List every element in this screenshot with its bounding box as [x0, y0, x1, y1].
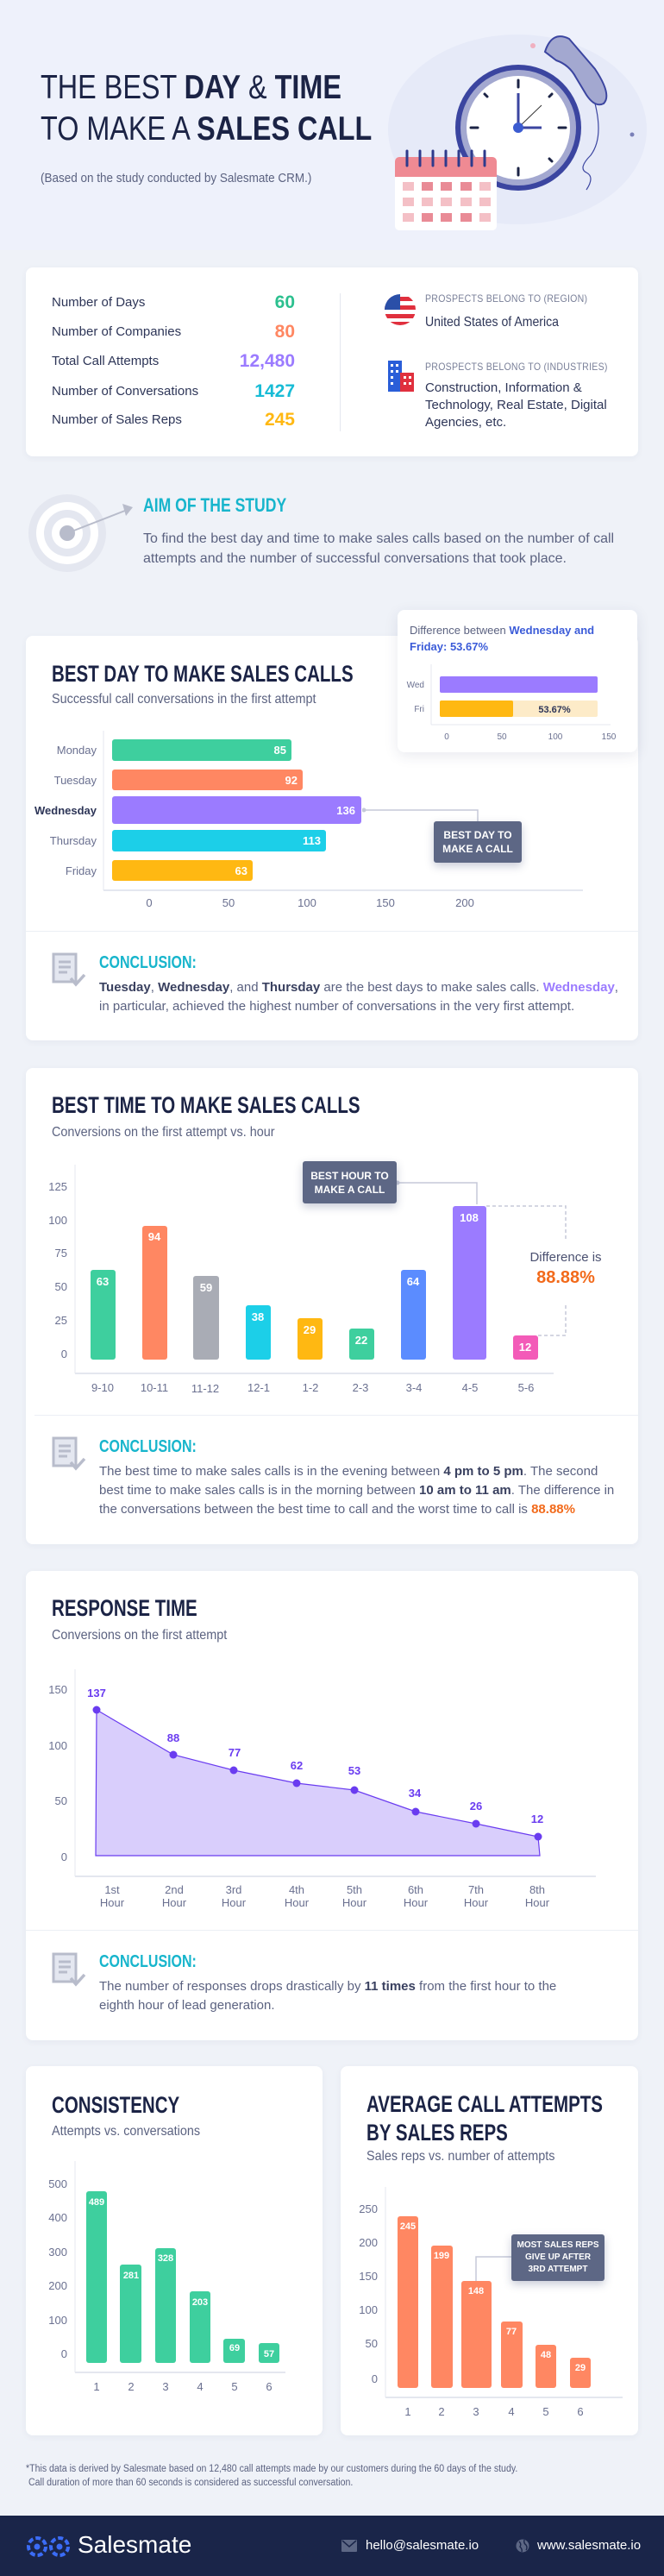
inset chart: 50 — [497, 732, 507, 742]
heading: best day: BEST DAY TO MAKE SALES CALLS — [52, 661, 354, 687]
bar chart: average call attempts: 50 — [366, 2337, 378, 2350]
bar chart: best day: 63 — [235, 864, 247, 877]
stats list: 80 — [275, 322, 295, 342]
bar chart: average call attempts: 250 — [359, 2202, 378, 2215]
bar chart: average call attempts: 150 — [359, 2270, 378, 2283]
bar chart: consistency: 200 — [48, 2279, 67, 2292]
bar chart: consistency: 5 — [231, 2380, 238, 2393]
stats list: Number of Companies — [52, 324, 181, 339]
logo — [27, 2531, 191, 2558]
subheading: consistency: Attempts vs. conversations — [52, 2124, 200, 2139]
aim of the study — [143, 494, 614, 566]
heading: response time: RESPONSE TIME — [52, 1595, 197, 1621]
bar chart: best day: Thursday — [50, 834, 97, 847]
bar chart: best time: 12 — [519, 1341, 531, 1354]
panel: consistency — [26, 2066, 323, 2435]
title: THE BEST DAY & TIME — [41, 69, 341, 106]
footnote: *This data is derived by Salesmate based on 12,480 call attempts made by our customers during the 60 days of the study. — [26, 2464, 517, 2474]
inset: wed vs fri: Difference between Wednesday and Friday: 53.67% — [410, 624, 594, 653]
bar chart: best time: 5-6 — [518, 1381, 534, 1394]
area chart: response time: 12 — [531, 1813, 543, 1825]
bar chart: best time: 125 — [48, 1180, 67, 1193]
bar chart: consistency: 400 — [48, 2211, 67, 2224]
stats list: 12,480 — [240, 351, 295, 371]
area chart: response time: Hour — [464, 1896, 489, 1909]
bar chart: average call attempts: 6 — [577, 2405, 584, 2418]
area chart: response time: 137 — [87, 1687, 106, 1700]
bar chart: best day: Monday — [57, 744, 97, 757]
logo: Salesmate — [78, 2531, 191, 2558]
bar chart: average call attempts: 0 — [372, 2372, 378, 2385]
bar chart: consistency: 2 — [128, 2380, 135, 2393]
stats list — [52, 292, 295, 430]
conclusion 2: The best time to make sales calls is in the evening between 4 pm to 5 pm. The second best time to make sales calls is in the morning between 10 am to 11 am. The difference in the conversations between the best time to call and the worst time to call is 88.88% — [99, 1464, 614, 1517]
bar chart: average call attempts: 29 — [575, 2363, 586, 2373]
callout: give up after 3rd attempt: MOST SALES REPS — [517, 2240, 598, 2250]
bar chart: consistency — [48, 2161, 285, 2393]
panel: best day — [26, 636, 638, 1040]
callout: give up after 3rd attempt — [511, 2234, 604, 2281]
callout: best day: MAKE A CALL — [442, 843, 513, 855]
inset chart: 53.67% — [538, 705, 571, 715]
bar chart: consistency: 69 — [229, 2343, 240, 2353]
stats list: Number of Conversations — [52, 384, 198, 399]
bar chart: best day: 113 — [303, 834, 321, 847]
heading: average call attempts — [366, 2091, 603, 2146]
bar chart: consistency: 500 — [48, 2177, 67, 2190]
website: www.salesmate.io — [537, 2538, 641, 2553]
bar chart: best time: 11-12 — [191, 1382, 219, 1395]
inset chart — [407, 664, 617, 742]
bar chart: best time: 1-2 — [303, 1381, 318, 1394]
region text: PROSPECTS BELONG TO (REGION) — [425, 292, 587, 305]
bar chart: average call attempts: 199 — [434, 2251, 449, 2261]
bar chart: best time: 59 — [200, 1281, 212, 1294]
bar chart: best time: 50 — [55, 1280, 67, 1293]
bar chart: average call attempts: 148 — [468, 2286, 484, 2296]
panel: study stats — [26, 267, 638, 456]
footnote: Call duration of more than 60 seconds is considered as successful conversation. — [28, 2478, 353, 2488]
area chart: response time: Hour — [342, 1896, 367, 1909]
area chart: response time: 3rd — [226, 1883, 241, 1896]
subheading: response time: Conversions on the first attempt — [52, 1628, 227, 1643]
area chart: response time: 77 — [229, 1746, 241, 1759]
bar chart: average call attempts: 2 — [438, 2405, 445, 2418]
bar chart: best time: 108 — [460, 1211, 479, 1224]
area chart: response time: 50 — [55, 1794, 67, 1807]
bar chart: best time: 22 — [355, 1334, 367, 1347]
conclusion 1: Tuesday, Wednesday, and Thursday are the best days to make sales calls. Wednesday, in particular, achieved the highest number of conversations in the very first attempt. — [99, 980, 618, 1014]
callout: best hour: MAKE A CALL — [315, 1184, 385, 1196]
bar chart: average call attempts: 48 — [541, 2350, 551, 2360]
conclusion 2: CONCLUSION: — [99, 1437, 197, 1456]
heading: average call attempts: AVERAGE CALL ATTEMPTS — [366, 2091, 603, 2117]
bar chart: average call attempts — [359, 2187, 623, 2418]
bar chart: best time: 63 — [97, 1275, 109, 1288]
callout: best day: BEST DAY TO — [443, 829, 512, 841]
footer — [0, 2516, 664, 2576]
bar chart: best time: 64 — [407, 1275, 420, 1288]
bar chart: average call attempts: 77 — [506, 2327, 517, 2337]
bar chart: average call attempts: 4 — [508, 2405, 515, 2418]
inset chart: Wed — [407, 681, 424, 690]
bar chart: best day: 50 — [222, 896, 235, 909]
panel: study stats: Construction, Information & Technology, Real Estate, Digital Agencies, etc. — [425, 380, 607, 430]
panel: response time — [26, 1571, 638, 2040]
area chart: response time: 88 — [167, 1731, 179, 1744]
area chart: response time: 62 — [291, 1759, 303, 1772]
bar chart: consistency: 3 — [162, 2380, 169, 2393]
industries text: PROSPECTS BELONG TO (INDUSTRIES) — [425, 361, 608, 373]
icon: conclusion 2 — [52, 1437, 86, 1470]
panel: best time — [26, 1068, 638, 1544]
bar chart: consistency: 6 — [266, 2380, 272, 2393]
area chart: response time: 7th — [468, 1883, 484, 1896]
area chart: response time — [48, 1669, 596, 1909]
bar chart: best time: 9-10 — [91, 1381, 114, 1394]
bar chart: best day: 92 — [285, 774, 298, 787]
panel: average call attempts — [341, 2066, 638, 2435]
icon: US flag — [385, 294, 416, 325]
aim of the study: AIM OF THE STUDY — [143, 494, 286, 516]
area chart: response time: 4th — [289, 1883, 304, 1896]
stats list: 60 — [275, 292, 295, 312]
heading: best time: BEST TIME TO MAKE SALES CALLS — [52, 1092, 360, 1118]
callout: best hour — [298, 1160, 478, 1211]
bar chart: consistency: 0 — [61, 2347, 67, 2360]
callout: difference — [529, 1250, 602, 1287]
inset chart: 0 — [444, 732, 449, 742]
bar chart: best time: 4-5 — [462, 1381, 478, 1394]
bar chart: best time: 2-3 — [353, 1381, 368, 1394]
illustration: clock, calendar, phone — [395, 35, 635, 230]
area chart: response time: Hour — [100, 1896, 125, 1909]
bar chart: best time: 10-11 — [141, 1381, 168, 1394]
bar chart: best time: 29 — [304, 1323, 316, 1336]
bar chart: best time: 0 — [61, 1348, 67, 1360]
bar chart: best day: Wednesday — [34, 804, 97, 817]
icon: buildings — [388, 361, 414, 392]
callout: give up after 3rd attempt: GIVE UP AFTER — [525, 2252, 591, 2262]
callout: best hour: BEST HOUR TO — [310, 1170, 389, 1182]
bar chart: average call attempts: 3 — [473, 2405, 479, 2418]
conclusion 3 — [99, 1952, 556, 2013]
title: TO MAKE A SALES CALL — [41, 110, 372, 148]
bar chart: consistency: 281 — [123, 2271, 139, 2281]
inset chart: 100 — [548, 732, 563, 742]
header background — [0, 0, 664, 250]
area chart: response time: 34 — [409, 1787, 422, 1800]
area chart: response time: 53 — [348, 1764, 360, 1777]
bar chart: consistency: 328 — [158, 2253, 173, 2264]
area chart: response time: 100 — [48, 1739, 67, 1752]
title — [41, 69, 372, 148]
stats list: Number of Sales Reps — [52, 412, 182, 427]
bar chart: best day — [34, 731, 583, 909]
area chart: response time: 2nd — [165, 1883, 184, 1896]
bar chart: average call attempts: 1 — [404, 2405, 411, 2418]
bar chart: consistency: 57 — [264, 2349, 274, 2359]
bar chart: consistency: 4 — [197, 2380, 204, 2393]
panel: study stats: United States of America — [425, 315, 559, 330]
conclusion 2 — [99, 1437, 614, 1517]
stats list: Total Call Attempts — [52, 354, 159, 368]
bar chart: average call attempts: 5 — [542, 2405, 549, 2418]
area chart: response time: 5th — [347, 1883, 362, 1896]
conclusion 3: CONCLUSION: — [99, 1952, 197, 1971]
area chart: response time: Hour — [222, 1896, 247, 1909]
area chart: response time: 8th — [529, 1883, 545, 1896]
area chart: response time: Hour — [162, 1896, 187, 1909]
bar chart: best day: 136 — [336, 804, 355, 817]
bar chart: best day: Friday — [66, 864, 97, 877]
area chart: response time: 0 — [61, 1850, 67, 1863]
inset chart: 150 — [602, 732, 617, 742]
bar chart: best day: 0 — [146, 896, 153, 909]
area chart: response time: Hour — [285, 1896, 310, 1909]
email: hello@salesmate.io — [366, 2538, 479, 2553]
bar chart: best day: 150 — [376, 896, 395, 909]
area chart: response time: 150 — [48, 1683, 67, 1696]
bar chart: best time: 3-4 — [406, 1381, 422, 1394]
bar chart: best day: 200 — [455, 896, 474, 909]
bar chart: best day: Tuesday — [54, 774, 97, 787]
bar chart: best day: 100 — [298, 896, 316, 909]
stats list: 245 — [265, 410, 295, 430]
bar chart: best time: 75 — [55, 1247, 67, 1260]
callout: difference: Difference is — [529, 1250, 602, 1265]
bar chart: consistency: 203 — [192, 2297, 208, 2308]
bar chart: best time: 12-1 — [247, 1381, 270, 1394]
bar chart: average call attempts: 245 — [400, 2221, 416, 2232]
area chart: response time: 1st — [104, 1883, 120, 1896]
area chart: response time: Hour — [404, 1896, 429, 1909]
icon: conclusion 1 — [52, 952, 86, 987]
heading: consistency: CONSISTENCY — [52, 2092, 179, 2118]
bar chart: best time: 38 — [252, 1310, 264, 1323]
bar chart: consistency: 489 — [89, 2197, 104, 2208]
bar chart: best time: 25 — [55, 1314, 67, 1327]
bar chart: consistency: 300 — [48, 2246, 67, 2259]
bar chart: consistency: 100 — [48, 2314, 67, 2327]
area chart: response time: 26 — [470, 1800, 482, 1813]
icon: conclusion 3 — [52, 1953, 86, 1986]
bar chart: best time — [48, 1165, 567, 1395]
bar chart: consistency: 1 — [93, 2380, 100, 2393]
subheading: best time: Conversions on the first attempt vs. hour — [52, 1125, 275, 1140]
icon: target — [28, 494, 133, 572]
stats list: Number of Days — [52, 295, 145, 310]
stats list: 1427 — [254, 381, 295, 401]
callout: best day — [362, 807, 526, 870]
bar chart: average call attempts: 200 — [359, 2236, 378, 2249]
inset chart: Fri — [414, 705, 424, 714]
bar chart: best day: 85 — [274, 744, 286, 757]
area chart: response time: 6th — [408, 1883, 423, 1896]
callout: give up after 3rd attempt: 3RD ATTEMPT — [529, 2265, 587, 2274]
subtitle: (Based on the study conducted by Salesmate CRM.) — [41, 171, 311, 185]
subheading: average call attempts: Sales reps vs. number of attempts — [366, 2149, 555, 2164]
bar chart: best time: 94 — [148, 1230, 161, 1243]
area chart: response time: Hour — [525, 1896, 550, 1909]
subheading: best day: Successful call conversations in the first attempt — [52, 692, 316, 707]
callout: difference: 88.88% — [536, 1268, 595, 1287]
bar chart: best time: 100 — [48, 1214, 67, 1227]
conclusion 1 — [99, 953, 618, 1014]
conclusion 1: CONCLUSION: — [99, 953, 197, 972]
aim of the study: To find the best day and time to make sales calls based on the number of call attempts and the number of successful conversations that took place. — [143, 531, 614, 566]
conclusion 3: The number of responses drops drastically by 11 times from the first hour to the eighth hour of lead generation. — [99, 1979, 556, 2013]
footnote — [26, 2464, 517, 2488]
inset: wed vs fri — [398, 610, 637, 752]
bar chart: average call attempts: 100 — [359, 2303, 378, 2316]
heading: average call attempts: BY SALES REPS — [366, 2120, 508, 2146]
